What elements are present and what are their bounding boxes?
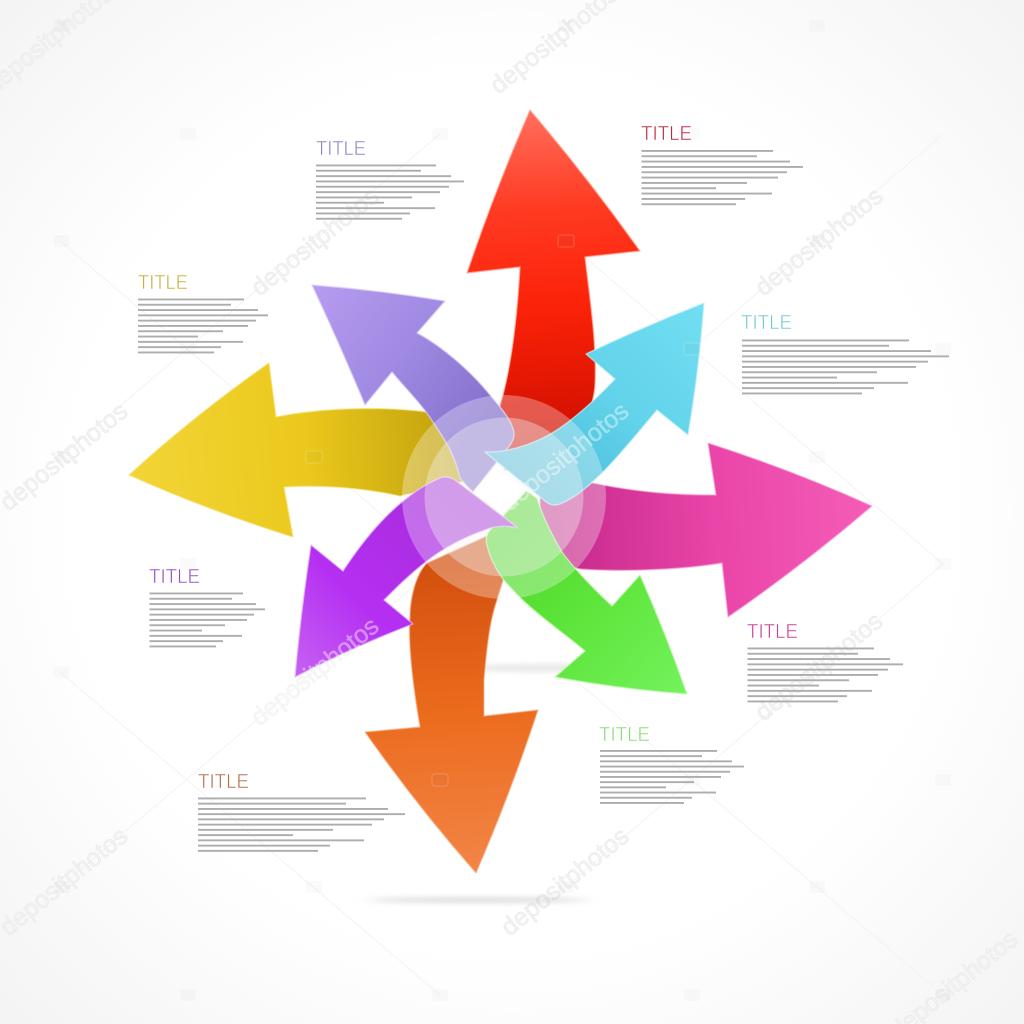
watermark over arrows bbox=[246, 397, 634, 732]
title: green: TITLE bbox=[599, 724, 650, 746]
watermark text: depositphotos bbox=[246, 612, 384, 732]
text block: yellow bbox=[138, 272, 268, 353]
title: orange: TITLE bbox=[198, 771, 249, 793]
body lines: violet bbox=[150, 592, 265, 647]
body lines: green bbox=[600, 750, 744, 804]
watermark text: depositphotos bbox=[750, 607, 888, 727]
arrow: yellow bbox=[129, 363, 470, 537]
body lines: orange bbox=[198, 798, 405, 852]
watermark text: depositphotos bbox=[750, 182, 888, 302]
watermark text: depositphotos bbox=[246, 182, 384, 302]
arrow: violet bbox=[295, 477, 518, 677]
text block: violet bbox=[149, 566, 265, 647]
title: magenta: TITLE bbox=[747, 621, 798, 643]
title: violet: TITLE bbox=[149, 566, 200, 588]
body lines: yellow bbox=[138, 298, 268, 353]
body lines: sky blue bbox=[742, 340, 949, 394]
centre white diamond bbox=[473, 465, 526, 514]
ground shadow: orange arrow bbox=[368, 898, 588, 902]
arrow: red bbox=[467, 110, 640, 470]
body lines: red bbox=[642, 150, 803, 205]
arrow: lavender bbox=[312, 285, 514, 492]
title: sky blue: TITLE bbox=[741, 312, 792, 334]
watermark over arrows: depositphotos bbox=[496, 397, 634, 517]
arrow: green bbox=[486, 491, 687, 694]
arrow: magenta bbox=[540, 443, 872, 617]
arrow: orange bbox=[365, 530, 538, 873]
arrow: sky blue bbox=[485, 303, 704, 505]
watermark over arrows: depositphotos bbox=[246, 612, 384, 732]
title: red: TITLE bbox=[641, 123, 692, 145]
outer translucent ring bbox=[402, 395, 606, 599]
title: lavender: TITLE bbox=[316, 138, 366, 160]
ground shadow: green arrow bbox=[455, 664, 645, 672]
body lines: magenta bbox=[748, 648, 903, 702]
watermark text: depositphotos bbox=[496, 822, 634, 942]
title: yellow: TITLE bbox=[138, 272, 188, 294]
inner translucent circle bbox=[424, 418, 584, 576]
body lines: lavender bbox=[316, 164, 464, 220]
